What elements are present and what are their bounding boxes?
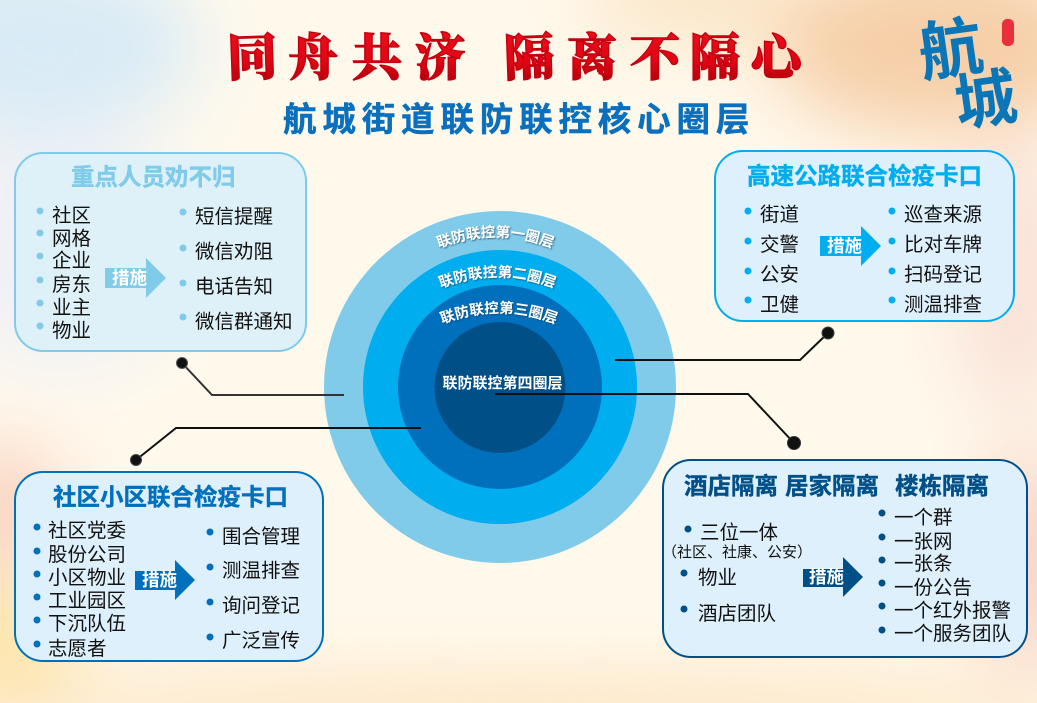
list: participants bbox=[52, 205, 92, 342]
heading: 高速公路联合检疫卡口 bbox=[747, 162, 982, 189]
panel: 社区小区联合检疫卡口 bbox=[15, 472, 323, 661]
list: measures: 微信群通知 bbox=[195, 311, 293, 333]
list: measures: 一张条 bbox=[894, 553, 953, 575]
list: participants: 企业 bbox=[52, 250, 91, 272]
arrow: 措施: 措施 bbox=[827, 236, 862, 256]
arrow: 措施 bbox=[803, 557, 863, 597]
list: measures: 短信提醒 bbox=[195, 206, 273, 228]
panel: 酒店隔离 居家隔离 楼栋隔离 bbox=[662, 460, 1027, 657]
list: measures: 电话告知 bbox=[195, 276, 273, 298]
list: measures: 围合管理 bbox=[222, 526, 300, 548]
list: participants bbox=[760, 204, 799, 316]
ring: third layer bbox=[398, 285, 602, 489]
list: participants: 物业 bbox=[52, 320, 91, 342]
panel: 高速公路联合检疫卡口 bbox=[715, 151, 1014, 321]
title: 同舟共济 隔离不隔心: 舟 bbox=[288, 18, 338, 90]
connector: bottom-right panel bbox=[495, 394, 800, 450]
bullets: measures bbox=[180, 208, 186, 320]
bullets: participants bbox=[36, 208, 44, 330]
title: 同舟共济 隔离不隔心 bbox=[226, 17, 809, 91]
label: third layer: 联防联控第三圈层 bbox=[439, 300, 560, 326]
list: participants: 网格 bbox=[52, 228, 92, 250]
list: participants: 工业园区 bbox=[48, 590, 126, 612]
list: participants bbox=[48, 520, 126, 660]
title: 同舟共济 隔离不隔心: 隔 bbox=[503, 17, 555, 91]
list: measures: 一张网 bbox=[894, 531, 953, 553]
list: participants: 交警 bbox=[760, 234, 799, 256]
title: 同舟共济 隔离不隔心: 离 bbox=[567, 18, 617, 90]
connector: bottom-left panel bbox=[130, 428, 421, 466]
list: measures: 巡查来源 bbox=[904, 204, 982, 226]
list: measures: 一份公告 bbox=[894, 577, 972, 599]
heading: 重点人员劝不归 bbox=[71, 164, 236, 190]
connector: top-right panel bbox=[615, 327, 834, 360]
panel: 重点人员劝不归 bbox=[15, 153, 306, 351]
bullets: measures bbox=[888, 208, 896, 304]
list: participants: 社区党委 bbox=[48, 520, 126, 542]
list: measures: 广泛宣传 bbox=[222, 630, 300, 652]
title: 同舟共济 隔离不隔心: 济 bbox=[415, 18, 465, 90]
bullets: measures bbox=[878, 510, 886, 634]
list: participants: 公安 bbox=[760, 264, 799, 286]
list: measures bbox=[894, 507, 1011, 645]
list: measures: 一个服务团队 bbox=[894, 623, 1011, 645]
ring: fourth layer bbox=[434, 322, 566, 453]
heading: 居家隔离 bbox=[785, 473, 879, 499]
ring: first layer bbox=[324, 211, 676, 563]
list: participants: 三位一体 bbox=[700, 522, 778, 544]
list: participants: 酒店团队 bbox=[698, 603, 776, 625]
list: measures: 扫码登记 bbox=[904, 264, 982, 286]
list: measures: 微信劝阻 bbox=[195, 241, 273, 263]
list: measures bbox=[222, 526, 300, 652]
logo: 航城 bbox=[914, 10, 1021, 140]
arrow: 措施: 措施 bbox=[809, 567, 844, 587]
ring: second layer bbox=[363, 250, 637, 524]
list: participants: 小区物业 bbox=[48, 567, 126, 589]
bullets: participants bbox=[34, 524, 40, 648]
list: measures: 一个群 bbox=[894, 507, 953, 529]
list: participants: 社区 bbox=[52, 205, 91, 227]
title: 同舟共济 隔离不隔心: 不 bbox=[630, 18, 683, 90]
list: participants: 物业 bbox=[698, 567, 737, 589]
list: measures: 一个红外报警 bbox=[894, 600, 1011, 622]
arrow: 措施 bbox=[820, 226, 881, 266]
heading: 楼栋隔离 bbox=[895, 473, 989, 499]
note: 社区、社康、公安: （社区、社康、公安） bbox=[662, 544, 812, 561]
arrow: 措施 bbox=[135, 560, 195, 600]
label: fourth layer: 联防联控第四圈层 bbox=[442, 374, 563, 392]
icon: red seal bbox=[1002, 19, 1014, 46]
bullets: measures bbox=[206, 528, 214, 640]
label: second layer: 联防联控第二圈层 bbox=[438, 264, 558, 290]
list: participants: 卫健 bbox=[760, 294, 799, 316]
logo: 航城: 城 bbox=[950, 63, 1021, 140]
title: 同舟共济 隔离不隔心: 隔 bbox=[690, 18, 740, 90]
heading: 酒店隔离 bbox=[684, 473, 778, 499]
subtitle: 航城街道联防联控核心圈层 bbox=[283, 102, 755, 139]
connector: top-left panel bbox=[176, 358, 344, 395]
list: participants: 街道 bbox=[760, 204, 799, 226]
arrow: 措施: 措施 bbox=[112, 268, 147, 288]
concentric circles bbox=[324, 211, 676, 563]
title: 同舟共济 隔离不隔心: 同 bbox=[226, 17, 278, 91]
logo: 航城: 航 bbox=[914, 10, 987, 90]
list: participants bbox=[698, 522, 778, 625]
list: participants: 房东 bbox=[52, 274, 91, 296]
title: 同舟共济 隔离不隔心: 共 bbox=[352, 18, 404, 90]
list: participants: 股份公司 bbox=[48, 544, 126, 566]
heading bbox=[684, 473, 989, 499]
list: participants: 志愿者 bbox=[48, 638, 107, 660]
bullets: participants bbox=[744, 208, 752, 304]
arrow: 措施: 措施 bbox=[142, 570, 177, 590]
list: measures: 测温排查 bbox=[222, 560, 300, 582]
list: measures bbox=[195, 206, 293, 333]
list: measures bbox=[904, 204, 982, 316]
label: first layer: 联防联控第一圈层 bbox=[436, 224, 556, 250]
bullets: participants bbox=[680, 526, 692, 612]
list: measures: 询问登记 bbox=[222, 595, 300, 617]
arrow: 措施 bbox=[105, 258, 166, 298]
list: measures: 比对车牌 bbox=[904, 234, 982, 256]
list: participants: 下沉队伍 bbox=[48, 613, 126, 635]
heading: 社区小区联合检疫卡口 bbox=[53, 483, 288, 510]
title: 同舟共济 隔离不隔心: 心 bbox=[751, 18, 809, 90]
list: participants: 业主 bbox=[52, 297, 91, 319]
list: measures: 测温排查 bbox=[904, 294, 982, 316]
